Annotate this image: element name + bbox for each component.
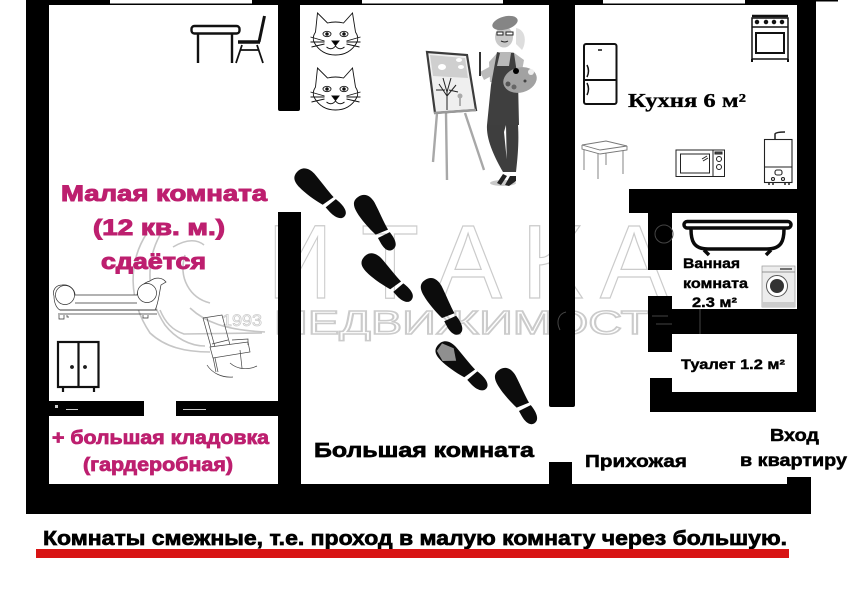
text: kitchen label: Кухня 6 м² xyxy=(628,90,746,112)
icon: microwave xyxy=(676,150,724,176)
icon: bathtub xyxy=(684,222,791,255)
footprints path xyxy=(290,164,544,428)
text: storage room label: + большая кладовка xyxy=(52,428,269,449)
icon: cat 1 xyxy=(310,13,360,55)
footprint 5 xyxy=(431,337,494,395)
text: entrance label: Вход xyxy=(770,425,819,445)
illustration: easel with painting xyxy=(427,52,484,180)
watermark: Itaka real estate logo: Т xyxy=(361,204,419,321)
text: storage room label: (гардеробная) xyxy=(83,455,233,476)
watermark: Itaka real estate logo: И xyxy=(268,204,332,321)
footprint 2 xyxy=(350,191,403,254)
apartment walls xyxy=(26,0,838,514)
text: bathroom label: 2.3 м² xyxy=(692,294,737,310)
icon: cat 2 xyxy=(310,68,360,110)
text: small room label: Малая комната xyxy=(61,181,268,206)
red underline xyxy=(36,549,789,558)
icon: wardrobe xyxy=(58,342,98,392)
icon: stove xyxy=(752,16,788,62)
footprint 1 xyxy=(290,164,352,223)
text: entrance label: в квартиру xyxy=(740,450,847,470)
text: bathroom label xyxy=(683,255,748,310)
footprint 6 xyxy=(491,364,544,428)
icon: fridge xyxy=(584,44,616,104)
windows xyxy=(110,0,745,4)
icon: washing machine xyxy=(762,266,795,307)
watermark: Itaka real estate logo xyxy=(133,204,680,352)
text: bathroom label: Ванная xyxy=(683,255,740,271)
watermark: Itaka real estate logo: НЕДВИЖИМОСТЬ xyxy=(274,304,680,341)
watermark: Itaka real estate logo: К xyxy=(521,204,583,321)
text: small room label xyxy=(61,181,268,274)
icon: gas boiler xyxy=(764,132,792,185)
text: toilet label: Туалет 1.2 м² xyxy=(681,356,785,372)
icon: table and chair xyxy=(192,16,264,63)
text: storage room label xyxy=(52,428,269,476)
text: hallway label: Прихожая xyxy=(585,451,687,471)
text: bathroom label: комната xyxy=(683,275,748,291)
illustration: woman painter xyxy=(480,13,540,186)
footprint 3 xyxy=(357,249,419,306)
text: big room label: Большая комната xyxy=(314,439,535,462)
text: small room label: (12 кв. м.) xyxy=(93,215,225,240)
watermark: Itaka real estate logo: 1993 xyxy=(222,311,262,330)
icon: sofa xyxy=(53,278,166,319)
text: entrance label xyxy=(740,425,847,470)
text: bottom note: Комнаты смежные, т.е. проход в малую комнату через большую. xyxy=(43,527,787,550)
watermark: Itaka real estate logo: А xyxy=(434,204,502,321)
watermark: Itaka real estate logo: А xyxy=(600,204,668,321)
footprint 4 xyxy=(417,274,469,339)
icon: kitchen table xyxy=(582,141,627,179)
text: small room label: сдаётся xyxy=(101,249,206,274)
icon: rocking chair xyxy=(203,315,257,377)
